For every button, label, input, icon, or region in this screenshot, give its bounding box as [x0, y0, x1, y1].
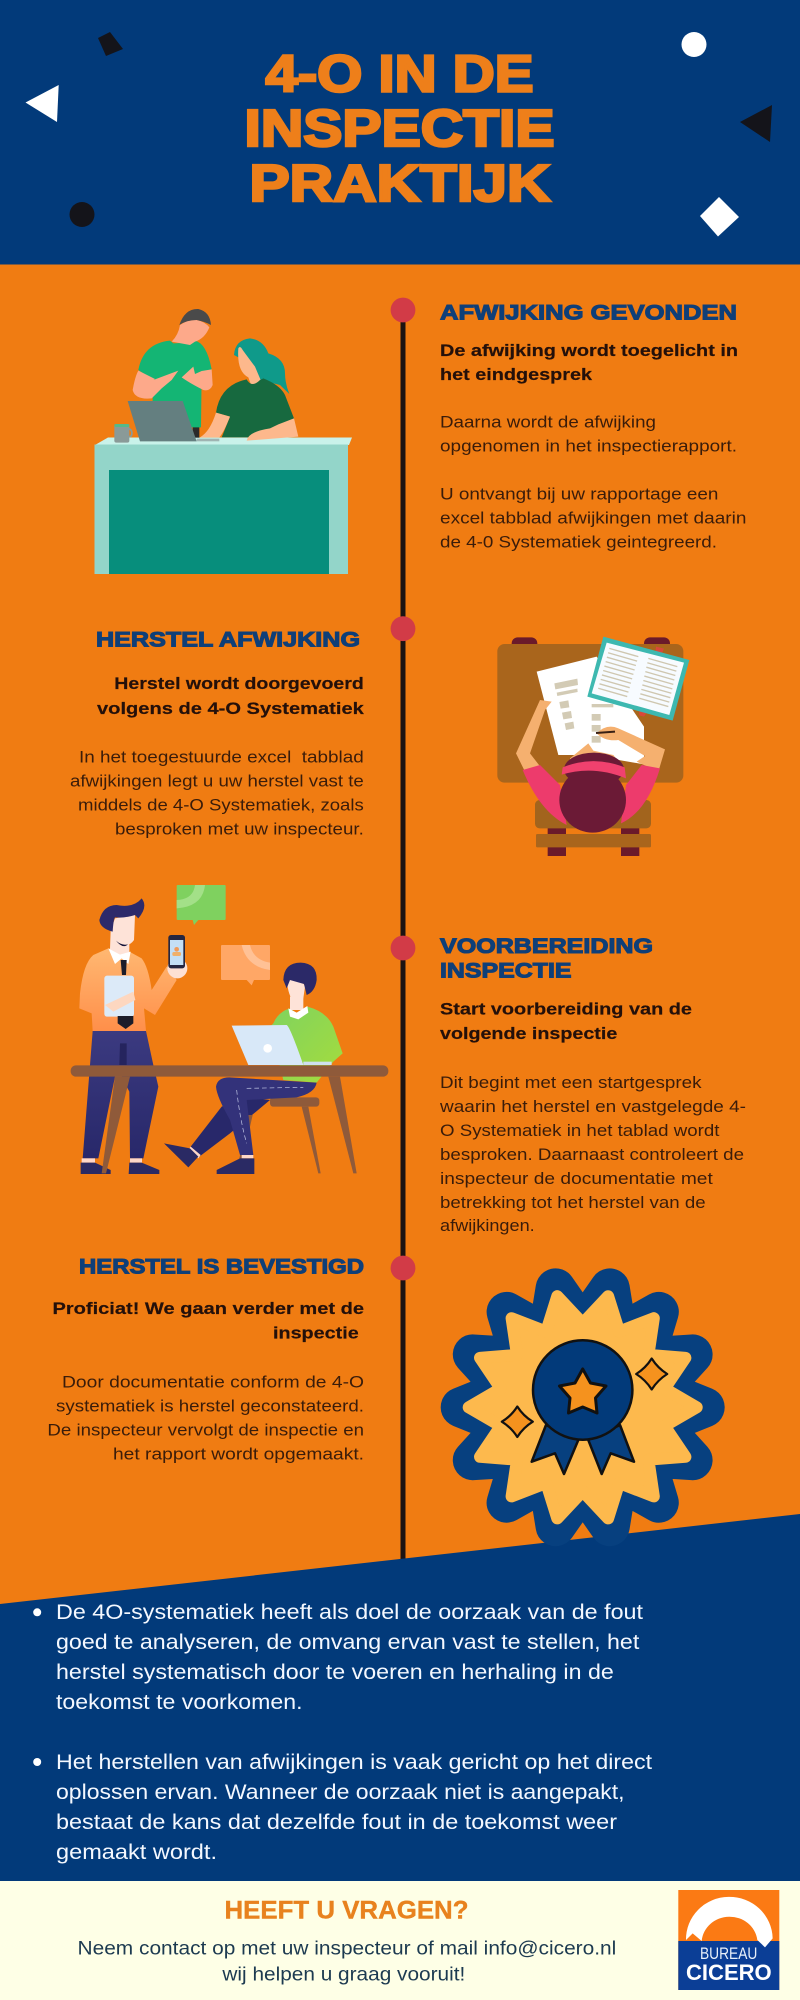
text block: herstel is bevestigd: systematiek is herstel geconstateerd. [56, 1398, 364, 1416]
bullet 2 [33, 1751, 652, 1864]
bullet 2: bestaat de kans dat dezelfde fout in de toekomst weer [56, 1811, 617, 1834]
timeline dot 3 [391, 936, 415, 960]
text block: afwijking gevonden: opgenomen in het inspectierapport. [440, 438, 737, 456]
text block: herstel afwijking [70, 628, 364, 839]
seated man [164, 963, 343, 1174]
panel: header [0, 0, 800, 264]
text block: herstel afwijking: HERSTEL AFWIJKING [96, 628, 360, 652]
text block: afwijking gevonden: AFWIJKING GEVONDEN [440, 301, 737, 325]
text block: voorbereiding inspectie: afwijkingen. [440, 1217, 535, 1235]
papers [537, 657, 644, 764]
text block: voorbereiding inspectie: O Systematiek in het tablad wordt [440, 1122, 720, 1140]
sparkle right [636, 1358, 667, 1390]
star [560, 1369, 606, 1413]
text block: herstel afwijking: volgens de 4-O Systematiek [97, 699, 364, 718]
text block: voorbereiding inspectie: inspecteur de documentatie met [440, 1170, 713, 1188]
text block: afwijking gevonden: excel tabblad afwijkingen met daarin [440, 509, 746, 527]
text block: voorbereiding inspectie: Start voorbereiding van de [440, 1000, 692, 1018]
bullet list [33, 1601, 652, 1864]
text block: voorbereiding inspectie: volgende inspectie [440, 1024, 617, 1043]
table [71, 1065, 388, 1173]
illustration: person studying at desk from above [497, 637, 689, 856]
footer heading: HEEFT U VRAGEN? [224, 1897, 468, 1925]
illustration: two colleagues at a desk [94, 309, 352, 574]
text block: voorbereiding inspectie: waarin het herstel en vastgelegde 4- [439, 1098, 746, 1116]
bullet 1 [33, 1601, 643, 1714]
text block: afwijking gevonden: De afwijking wordt toegelicht in [440, 341, 738, 360]
text block: herstel afwijking: besproken met uw inspecteur. [115, 821, 364, 839]
speech bubbles [177, 885, 270, 985]
text block: voorbereiding inspectie: Dit begint met een startgesprek [440, 1074, 702, 1092]
desk [94, 438, 352, 574]
title: INSPECTIE [244, 100, 554, 158]
bullet 1: De 4O-systematiek heeft als doel de oorzaak van de fout [56, 1601, 643, 1624]
footer text [78, 1937, 616, 1986]
text block: herstel is bevestigd: HERSTEL IS BEVESTIGD [79, 1255, 364, 1279]
text block: herstel afwijking: afwijkingen legt u uw herstel vast te [70, 773, 364, 791]
decorative shapes [26, 32, 772, 236]
text block: voorbereiding inspectie: VOORBEREIDING [440, 934, 653, 958]
man [133, 309, 213, 438]
text block: voorbereiding inspectie: besproken. Daarnaast controleert de [440, 1146, 744, 1164]
timeline dot 4 [391, 1256, 415, 1280]
text block: herstel afwijking: Herstel wordt doorgevoerd [114, 674, 364, 693]
footer text: wij helpen u graag vooruit! [221, 1964, 465, 1986]
standing man [79, 898, 187, 1174]
panel: footer [0, 1881, 800, 2000]
badge outer edge [461, 1288, 705, 1526]
title: PRAKTIJK [250, 155, 551, 213]
timeline line [400, 310, 406, 1560]
bullet 1: toekomst te voorkomen. [56, 1691, 302, 1714]
text block: herstel afwijking: In het toegestuurde excel tabblad [79, 749, 364, 767]
sparkle left [502, 1406, 533, 1437]
logo [678, 1890, 779, 1990]
desk top [497, 644, 683, 783]
text block: voorbereiding inspectie [439, 934, 746, 1235]
bullet 2: gemaakt wordt. [56, 1841, 217, 1864]
text block: afwijking gevonden: Daarna wordt de afwijking [440, 414, 656, 432]
footer text: Neem contact op met uw inspecteur of mail info@cicero.nl [78, 1937, 616, 1959]
logo: CICERO [686, 1960, 772, 1985]
person [516, 700, 665, 833]
text block: herstel is bevestigd: Door documentatie conform de 4-O [62, 1374, 364, 1392]
text block: afwijking gevonden: het eindgesprek [440, 365, 593, 384]
text block: afwijking gevonden: de 4-0 Systematiek geintegreerd. [440, 533, 717, 551]
bullet 1: herstel systematisch door te voeren en herhaling in de [56, 1661, 614, 1684]
text block: herstel is bevestigd: het rapport wordt opgemaakt. [113, 1446, 364, 1464]
text block: herstel is bevestigd [47, 1255, 364, 1464]
timeline dot 2 [391, 616, 415, 641]
medal [533, 1340, 632, 1440]
chair [512, 637, 670, 856]
text block: voorbereiding inspectie: betrekking tot het herstel van de [440, 1194, 706, 1212]
panel: blue bottom section background [0, 1514, 800, 1881]
text block: herstel is bevestigd: De inspecteur vervolgt de inspectie en [47, 1422, 364, 1440]
book [587, 637, 689, 721]
bullet 2: Het herstellen van afwijkingen is vaak gericht op het direct [56, 1751, 652, 1774]
text block: voorbereiding inspectie: INSPECTIE [440, 959, 572, 983]
bullet 1: goed te analyseren, de omvang ervan vast te stellen, het [56, 1631, 639, 1654]
badge yellow body [469, 1296, 697, 1518]
title [244, 46, 554, 213]
timeline dot 1 [391, 298, 415, 322]
woman [200, 338, 298, 441]
icon: award badge [461, 1288, 705, 1526]
ribbons [532, 1425, 634, 1474]
text block: afwijking gevonden [440, 301, 746, 551]
text block: herstel is bevestigd: inspectie [273, 1324, 359, 1342]
text block: herstel afwijking: middels de 4-O Systematiek, zoals [78, 797, 364, 815]
text block: afwijking gevonden: U ontvangt bij uw rapportage een [440, 485, 718, 503]
laptop and mug [114, 401, 219, 443]
bullet 2: oplossen ervan. Wanneer de oorzaak niet is aangepakt, [56, 1781, 624, 1804]
illustration: two colleagues talking at a table [71, 885, 388, 1174]
text block: herstel is bevestigd: Proficiat! We gaan verder met de [52, 1299, 364, 1318]
title: 4-O IN DE [266, 46, 534, 104]
logo: BUREAU [700, 1944, 757, 1963]
